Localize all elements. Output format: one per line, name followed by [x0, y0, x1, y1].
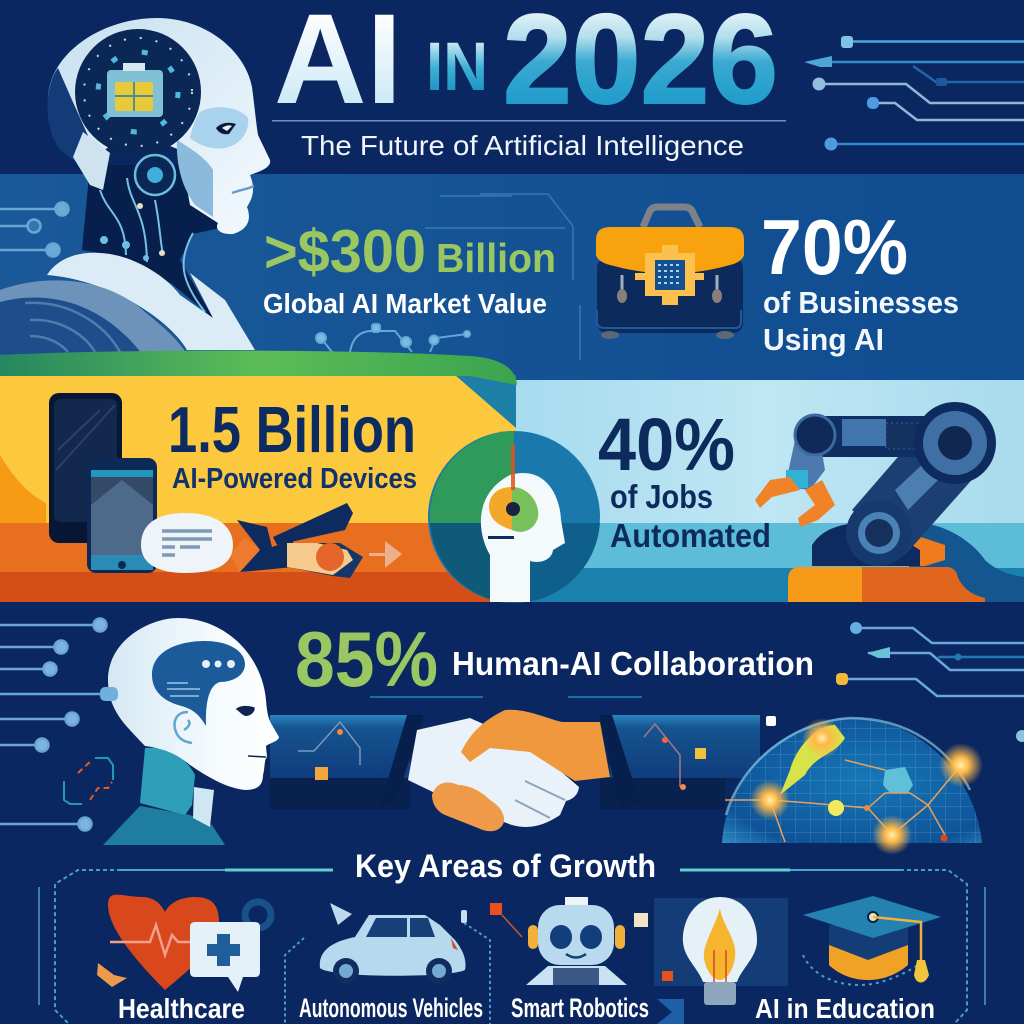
shoulders [103, 806, 225, 845]
stat value: 1.5 Billion [168, 393, 416, 466]
robot neck [82, 165, 220, 318]
stat label: Global AI Market Value [263, 288, 547, 319]
icon: speaker pod [141, 513, 233, 573]
stat: businesses [761, 203, 959, 357]
orange hand [461, 710, 610, 781]
heart [108, 895, 219, 990]
fingers [432, 782, 504, 831]
label: education: AI in Education [755, 993, 935, 1024]
icon: briefcase [596, 207, 744, 339]
neck nodes [100, 203, 165, 261]
illustration: human head [100, 618, 279, 845]
stat unit: Billion [436, 235, 556, 281]
circuit lines: band left [0, 202, 68, 256]
orange tip [230, 537, 263, 572]
eye and mouth [237, 707, 266, 757]
ear ring [135, 155, 175, 195]
pulse line [110, 925, 195, 955]
gripper arm [273, 503, 353, 545]
stat label: of Businesses [763, 285, 959, 320]
collar [193, 787, 214, 827]
arrow [369, 541, 402, 568]
stat: jobs [598, 403, 771, 554]
label: smart robotics: Smart Robotics [511, 993, 649, 1023]
icon: robot [490, 897, 627, 985]
stat label: of Jobs [610, 478, 713, 515]
eye socket [190, 107, 248, 148]
stat: collaboration [295, 615, 814, 703]
stat label: AI-Powered Devices [172, 463, 417, 495]
globe continents [883, 767, 913, 793]
icon: smartphone [49, 393, 122, 543]
neck [140, 748, 195, 815]
circuit lines: band centre [316, 194, 580, 360]
stat: devices [168, 393, 417, 495]
brain speech bubble [152, 641, 245, 726]
shoulder joint inner [0, 297, 142, 354]
illustration: robot head [0, 18, 270, 354]
neck wires [100, 178, 205, 312]
globe nodes [828, 800, 844, 816]
title [274, 0, 778, 131]
mouth [232, 186, 254, 193]
dark ring [245, 902, 271, 928]
disc glyphs [98, 52, 178, 132]
dark grip [287, 543, 363, 578]
cuff right [599, 715, 640, 808]
icon: handshake [380, 710, 640, 831]
arm lower link [852, 420, 985, 555]
heading: key areas: Key Areas of Growth [355, 848, 656, 884]
eye glint [222, 125, 232, 131]
stat: global market value [263, 218, 556, 319]
stat: businesses: Using AI [763, 322, 884, 357]
stat value: 40% [598, 403, 735, 486]
icon: car [320, 903, 467, 984]
icon: hourglass marker [657, 999, 684, 1024]
gripper wrist [785, 440, 825, 490]
panel: left yellow band [0, 351, 517, 602]
broken ring [64, 758, 113, 804]
icon: robot gripper [230, 503, 363, 578]
globe network [725, 760, 961, 842]
frame: growth section [39, 870, 985, 1024]
stat label: Human-AI Collaboration [452, 645, 814, 682]
stat value: >$300 [264, 218, 426, 285]
title: IN: IN [426, 28, 488, 105]
icon: healthcare [97, 895, 271, 992]
panel: handshake band [270, 715, 760, 809]
circuit lines: lower left [0, 618, 115, 830]
shoulder joint [0, 280, 187, 354]
stat value: 70% [761, 203, 908, 291]
circuit lines: top right [804, 36, 1024, 150]
stat: jobs: Automated [610, 517, 771, 554]
icon: AI head circle [428, 431, 600, 603]
ear [174, 712, 192, 743]
side ring [47, 68, 90, 165]
icon: robot arm [755, 402, 996, 602]
icon: light bulb [634, 897, 788, 1005]
robot shoulder [47, 253, 255, 350]
cuff left [380, 715, 424, 806]
bubble dots [202, 660, 235, 668]
robot head shell [48, 18, 270, 234]
head port [100, 687, 118, 701]
globe node glows [750, 780, 790, 820]
chip core [115, 82, 153, 111]
ear panel [73, 132, 110, 190]
label: autonomous vehicles: Autonomous Vehicles [299, 993, 483, 1023]
illustration: globe [722, 716, 983, 855]
brain disc [75, 29, 201, 155]
panel: right sky band [505, 380, 1024, 602]
arm base [788, 567, 985, 602]
arm joints [846, 500, 912, 566]
circuit lines: lower right [370, 622, 1024, 742]
cross [207, 934, 240, 966]
bubble lines [167, 683, 200, 696]
gripper fingers [755, 477, 835, 527]
stat value: 85% [295, 615, 438, 703]
eye [216, 123, 236, 134]
shoulder rings [25, 303, 120, 352]
label: healthcare: Healthcare [118, 993, 245, 1024]
disc ticks [84, 38, 192, 146]
jaw [237, 520, 293, 572]
white hand [408, 718, 579, 827]
icon: graduation cap [803, 896, 941, 982]
icon: tablet [87, 458, 157, 573]
tan handle [287, 543, 353, 575]
small hand [97, 963, 127, 987]
face shade [177, 140, 213, 217]
title rule [272, 120, 786, 122]
subtitle: The Future of Artificial Intelligence [301, 130, 744, 161]
panel: stats band [0, 174, 1024, 380]
chip [107, 70, 163, 117]
arm upper link [815, 416, 945, 457]
head [108, 618, 279, 790]
medical bubble [190, 922, 260, 992]
floating square [766, 716, 776, 726]
